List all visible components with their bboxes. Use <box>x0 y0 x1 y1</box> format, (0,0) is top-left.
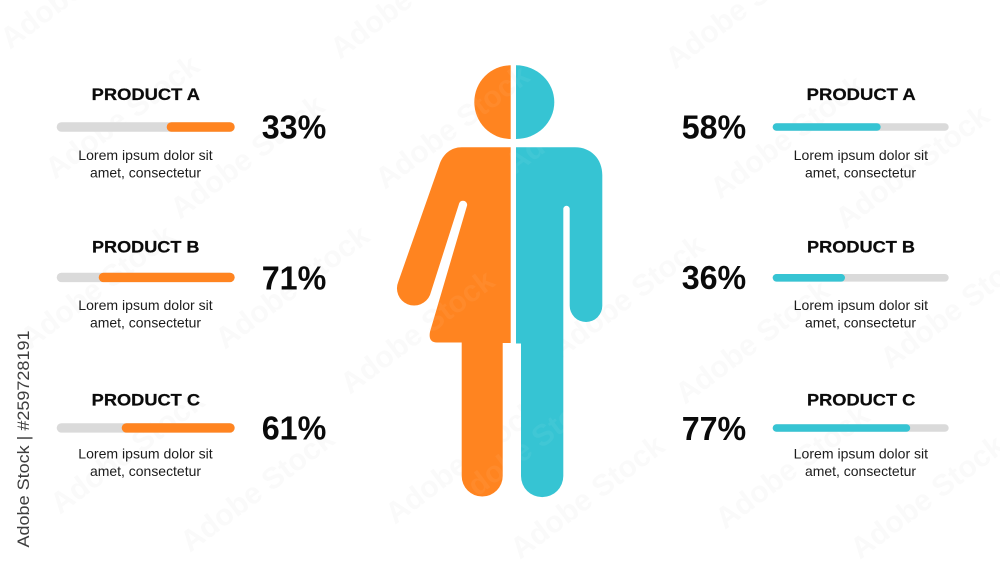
panel: left product A <box>57 85 326 180</box>
heading: PRODUCT C <box>92 391 200 410</box>
watermark background: Adobe Stock <box>544 229 711 366</box>
description: amet, consectetur <box>90 315 201 331</box>
watermark background: Adobe Stock <box>164 89 331 226</box>
woman head half <box>474 65 511 139</box>
description: amet, consectetur <box>805 314 916 330</box>
value: 61% <box>262 410 326 446</box>
description: amet, consectetur <box>805 463 916 479</box>
description <box>794 297 928 330</box>
watermark background: Adobe Stock <box>829 99 996 236</box>
heading: PRODUCT B <box>92 238 200 257</box>
value: 71% <box>262 260 326 296</box>
heading: PRODUCT A <box>807 85 916 104</box>
woman body half <box>397 147 511 497</box>
description <box>78 446 213 479</box>
description: amet, consectetur <box>805 164 916 180</box>
description: amet, consectetur <box>90 463 201 479</box>
progress bar 58% <box>773 123 949 131</box>
watermark background: Adobe Stock <box>209 219 376 356</box>
heading: PRODUCT C <box>807 391 915 410</box>
value: 58% <box>682 108 746 146</box>
watermark background: Adobe Stock <box>14 219 181 356</box>
description: Lorem ipsum dolor sit <box>78 446 213 462</box>
value: 33% <box>262 108 326 146</box>
description <box>78 297 213 331</box>
watermark over figure: Adobe Stock <box>499 44 666 181</box>
watermark background: Adobe Stock <box>44 384 211 521</box>
watermark over figure: Adobe Stock <box>369 59 536 196</box>
watermark background: Adobe Stock <box>704 69 871 206</box>
watermark over figure <box>334 44 666 516</box>
panel: left product B <box>57 238 326 331</box>
description: Lorem ipsum dolor sit <box>78 147 213 163</box>
value: 77% <box>682 410 746 447</box>
watermark background: Adobe Stock <box>379 394 546 531</box>
description <box>78 147 213 180</box>
progress bar 61% <box>57 423 235 433</box>
progress bar 77% <box>773 424 949 432</box>
description <box>794 147 928 180</box>
watermark background: Adobe Stock <box>174 422 341 559</box>
description: Lorem ipsum dolor sit <box>78 297 213 313</box>
description: amet, consectetur <box>90 164 201 180</box>
value: 36% <box>682 259 746 296</box>
man body half <box>516 147 602 497</box>
watermark background: Adobe Stock <box>39 49 206 186</box>
watermark background: Adobe Stock <box>669 274 836 411</box>
description <box>794 446 928 479</box>
progress bar 36% <box>773 274 949 282</box>
panel: right product C <box>682 391 949 479</box>
progress bar 33% <box>57 122 235 132</box>
watermark background: Adobe Stock <box>369 59 536 196</box>
watermark over figure: Adobe Stock <box>444 379 611 516</box>
man head half <box>516 65 554 139</box>
watermark background: Adobe Stock <box>504 429 671 563</box>
panel: right product A <box>682 85 949 180</box>
stock credit: Adobe Stock | #259728191 <box>14 330 33 548</box>
panel: right product B <box>682 238 949 330</box>
figure: half woman, half man <box>397 65 602 497</box>
description: Lorem ipsum dolor sit <box>794 147 928 163</box>
description: Lorem ipsum dolor sit <box>794 446 928 462</box>
description: Lorem ipsum dolor sit <box>794 297 928 313</box>
watermark background: Adobe Stock <box>334 264 501 401</box>
watermark over figure: Adobe Stock <box>334 264 501 401</box>
progress bar 71% <box>57 273 235 282</box>
panel: left product C <box>57 391 326 479</box>
heading: PRODUCT B <box>807 238 915 256</box>
watermark background: Adobe Stock <box>709 399 876 536</box>
heading: PRODUCT A <box>92 85 200 104</box>
